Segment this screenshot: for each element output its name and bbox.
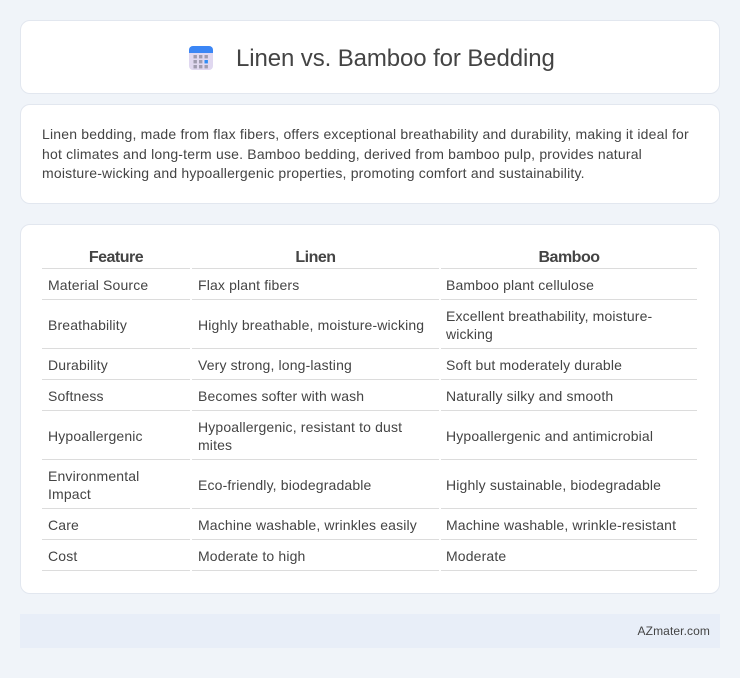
row: hypoallergenic: mites	[198, 437, 232, 453]
column headers	[89, 249, 600, 266]
row: cost: Cost	[48, 548, 77, 564]
row: care: Machine washable, wrinkle-resistant	[446, 517, 676, 533]
row: cost: Moderate to high	[198, 548, 305, 564]
comparison table panel	[20, 224, 720, 594]
row: environmental impact: Eco-friendly, biodegradable	[198, 477, 371, 493]
row: hypoallergenic: Hypoallergenic, resistant to dust	[198, 419, 402, 435]
footer credit: AZmater.com	[638, 624, 710, 638]
row: durability: Durability	[48, 357, 108, 373]
row: cost: Moderate	[446, 548, 506, 564]
row: softness: Becomes softer with wash	[198, 388, 364, 404]
intro text: hot climates and long-term use. Bamboo bedding, derived from bamboo pulp, provides natural	[42, 146, 642, 162]
row: breathability: Highly breathable, moisture-wicking	[198, 317, 424, 333]
row: cost	[48, 548, 506, 564]
icon: calendar	[189, 46, 213, 70]
row: material source: Bamboo plant cellulose	[446, 277, 594, 293]
title: Linen vs. Bamboo for Bedding	[236, 45, 555, 72]
row: care: Care	[48, 517, 79, 533]
row: softness: Naturally silky and smooth	[446, 388, 613, 404]
row: material source	[48, 277, 594, 293]
row: breathability: Excellent breathability, moisture-	[446, 308, 652, 324]
intro text	[42, 126, 689, 181]
footer bar	[20, 614, 720, 648]
row: durability: Very strong, long-lasting	[198, 357, 352, 373]
row: breathability: Breathability	[48, 317, 127, 333]
row: softness: Softness	[48, 388, 104, 404]
header panel	[20, 20, 720, 94]
row: breathability: wicking	[446, 326, 493, 342]
intro text: moisture-wicking and hypoallergenic properties, promoting comfort and sustainability.	[42, 165, 585, 181]
intro panel	[20, 104, 720, 204]
row: environmental impact: Impact	[48, 486, 91, 502]
intro text: Linen bedding, made from flax fibers, offers exceptional breathability and durability, making it ideal for	[42, 126, 689, 142]
row: softness	[48, 388, 613, 404]
row: durability	[48, 357, 622, 373]
row: care	[48, 517, 676, 533]
row: care: Machine washable, wrinkles easily	[198, 517, 417, 533]
row: hypoallergenic: Hypoallergenic	[48, 428, 143, 444]
row: environmental impact: Environmental	[48, 468, 139, 484]
row: material source: Material Source	[48, 277, 148, 293]
row: material source: Flax plant fibers	[198, 277, 299, 293]
row: durability: Soft but moderately durable	[446, 357, 622, 373]
row: hypoallergenic	[48, 419, 653, 453]
row: breathability	[48, 308, 652, 342]
row: environmental impact	[48, 468, 661, 502]
comparison table	[42, 249, 697, 571]
row: hypoallergenic: Hypoallergenic and antimicrobial	[446, 428, 653, 444]
column headers: Feature	[89, 249, 143, 266]
row: environmental impact: Highly sustainable, biodegradable	[446, 477, 661, 493]
column headers: Bamboo	[538, 249, 600, 266]
column headers: Linen	[295, 249, 336, 266]
